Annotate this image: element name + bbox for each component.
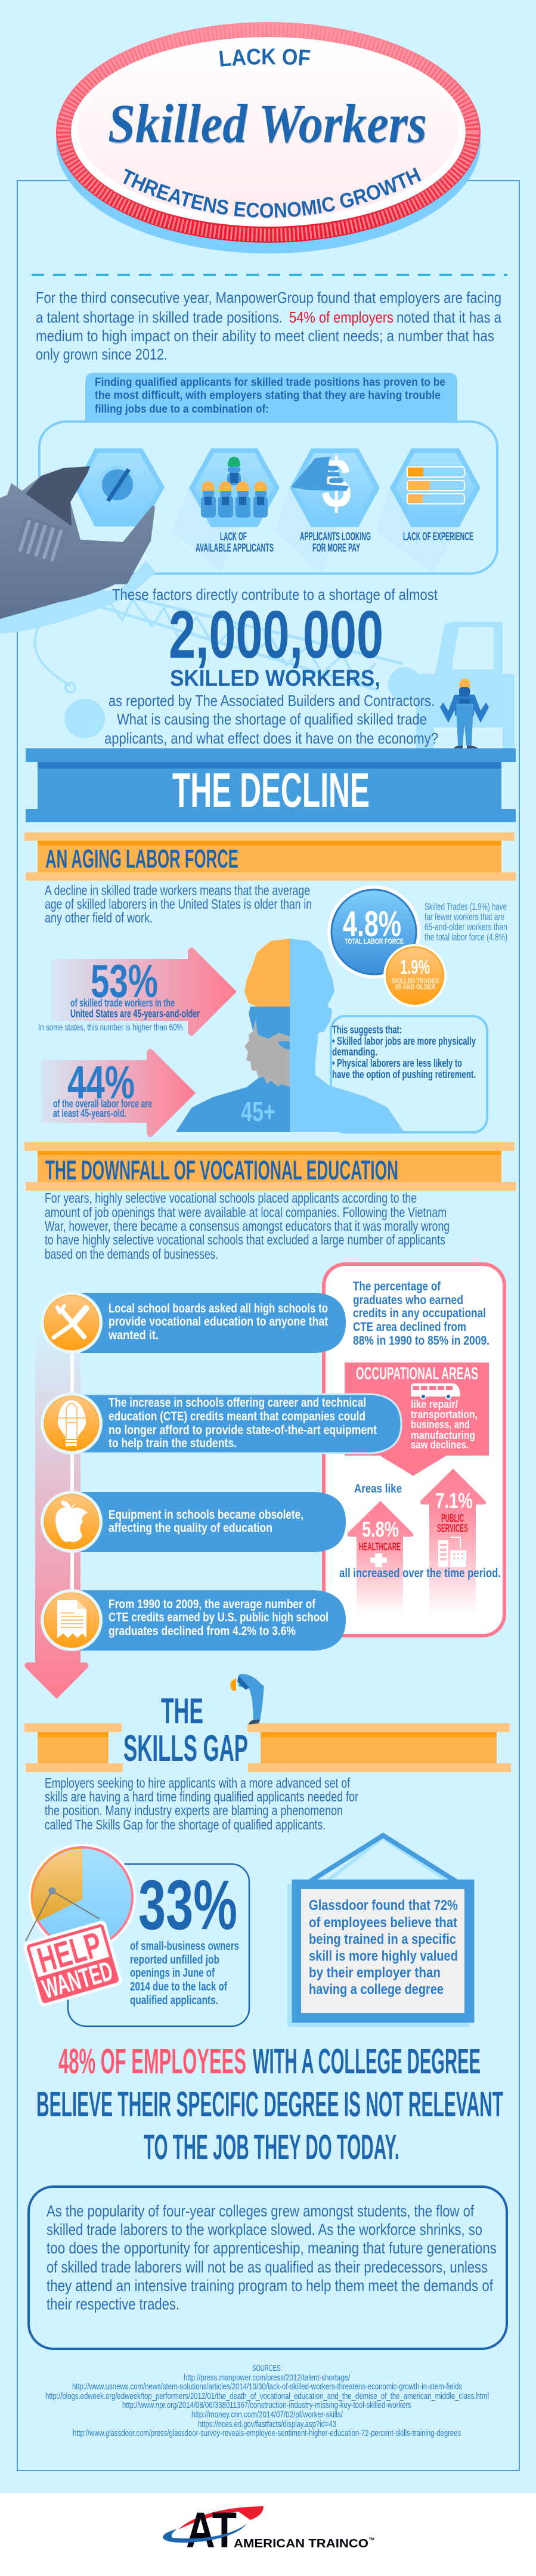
icon: bending worker — [230, 1674, 264, 1724]
logo: American Trainco: AMERICAN TRAINCO — [234, 2537, 368, 2550]
panel: occupational credits — [324, 1264, 504, 1636]
step 4: credits declined: From 1990 to 2009, the average number of — [109, 1597, 316, 1611]
icon: apple — [55, 1501, 88, 1542]
house: glassdoor stat: having a college degree — [309, 1981, 444, 1998]
logo: American Trainco — [163, 2502, 374, 2558]
stat circle: 1.9% skilled trades: SKILLED TRADES — [392, 977, 439, 985]
up arrow: healthcare 5.8%: HEALTHCARE — [359, 1541, 401, 1553]
icon: money hexagon: $ — [321, 444, 351, 523]
pie chart clock — [26, 1844, 136, 1951]
occupational areas box: saw declines. — [411, 1439, 469, 1451]
house: glassdoor stat: Glassdoor found that 72% — [309, 1897, 458, 1914]
heading banner: the decline — [26, 748, 516, 822]
logo: American Trainco: TM — [369, 2538, 374, 2541]
occupational areas box: like repair/ — [411, 1398, 458, 1410]
aging text: age of skilled laborers in the United States is older than in — [45, 896, 312, 912]
heading banner: an aging labor force — [24, 832, 516, 881]
sources: http://money.cnn.com/2014/07/02/pf/worker-skills/ — [191, 2410, 343, 2420]
panel: occupational credits: 88% in 1990 to 85% in 2009. — [353, 1334, 489, 1348]
sources: SOURCES: — [252, 2363, 282, 2373]
callout: this suggests that: • Physical laborers are less likely to — [332, 1057, 462, 1069]
callout heading: the most difficult, with employers stating that they are having trouble — [95, 389, 441, 402]
step 1: school boards: Local school boards asked all high schools to — [109, 1302, 328, 1315]
icon: shrugging worker — [440, 679, 489, 749]
skills gap text: the position. Many industry experts are blaming a phenomenon — [45, 1803, 343, 1818]
arrow stat: 53% — [38, 948, 237, 1036]
occupational areas box: business, and — [411, 1419, 470, 1431]
shortage statement: These factors directly contribute to a shortage of almost — [112, 586, 438, 603]
conclusion box: their respective trades. — [47, 2295, 179, 2313]
icon: available applicants hexagon — [189, 448, 280, 527]
up arrow: public services 7.1%: 7.1% — [435, 1488, 473, 1513]
aging text: any other field of work. — [45, 910, 153, 925]
step 1: school boards — [41, 1292, 346, 1354]
intro paragraph: only grown since 2012. — [36, 345, 168, 363]
stat circle: 1.9% skilled trades: 65 AND OLDER — [395, 983, 435, 991]
aging text: A decline in skilled trade workers means that the average — [45, 883, 310, 898]
icon: money hexagon — [290, 444, 380, 527]
label: lack of experience: LACK OF EXPERIENCE — [403, 531, 473, 543]
callout heading: filling jobs due to a combination of: — [95, 403, 269, 416]
up arrow: healthcare 5.8%: 5.8% — [362, 1517, 399, 1541]
stat circle: 4.8% total labor force: 4.8% — [343, 904, 401, 944]
sources: https://nces.ed.gov/fastfacts/display.asp?id=43 — [198, 2419, 336, 2429]
icon: buildings — [438, 1537, 466, 1567]
wrench illustration — [0, 466, 156, 633]
panel: combination of factors — [39, 373, 497, 574]
step 2: CTE credits: no longer afford to provide state-of-the-art equipment — [109, 1423, 377, 1437]
intro paragraph: noted that it has a — [396, 308, 501, 326]
label: applicants looking for more pay — [300, 531, 371, 555]
title: skilled workers: Skilled Workers — [108, 93, 427, 154]
conclusion box — [29, 2187, 507, 2349]
stat circle: 1.9% skilled trades — [383, 944, 447, 1007]
icon: document — [57, 1600, 86, 1638]
shortage statement: applicants, and what effect does it have on the economy? — [104, 729, 438, 747]
big number: 2,000,000: 2,000,000 — [169, 597, 383, 672]
stat circle: 4.8% total labor force — [327, 886, 420, 979]
stat box: 33% — [68, 1864, 249, 2026]
decorative crane and truck — [35, 596, 515, 748]
step 4: credits declined: CTE credits earned by U.S. public high school — [109, 1611, 329, 1624]
icon: experience bars hexagon — [390, 448, 481, 527]
help wanted sign: WANTED — [39, 1955, 116, 2004]
title: lack of: LACK OF — [219, 49, 310, 67]
shortage statement: What is causing the shortage of qualified skilled trade — [117, 710, 427, 728]
arrow stat: 53%: 53% — [91, 955, 158, 1007]
arrow stat: 44%: 44% — [67, 1056, 135, 1109]
icon: screw hexagon — [75, 448, 165, 527]
arrow stat: 44% — [41, 1049, 196, 1137]
house: glassdoor stat — [287, 1835, 475, 2027]
up arrow: public services 7.1%: PUBLIC — [441, 1512, 464, 1524]
caption: all increased: all increased over the time period. — [339, 1566, 501, 1580]
step 3: obsolete equipment — [41, 1491, 346, 1553]
footer — [0, 2493, 536, 2576]
sources: http://press.manpower.com/press/2012/talent-shortage/ — [184, 2373, 351, 2383]
arrow stat: 44%: at least 45-years-old. — [53, 1107, 126, 1119]
headline: 48% of employees — [36, 2042, 503, 2167]
house: glassdoor stat: of employees believe that — [309, 1915, 457, 1931]
vocational text — [45, 1190, 450, 1262]
arrow stat: 53%: United States are 45-years-and-older — [70, 1008, 200, 1020]
stat box: 33%: reported unfilled job — [130, 1953, 219, 1967]
panel: occupational credits: graduates who earned — [353, 1293, 463, 1307]
label: areas like: Areas like — [354, 1482, 402, 1496]
label: lack of available applicants: AVAILABLE APPLICANTS — [196, 542, 274, 555]
stat circle: 1.9% skilled trades: 1.9% — [400, 956, 430, 978]
callout heading — [85, 373, 457, 422]
skills gap text — [45, 1775, 358, 1832]
label: applicants looking for more pay: FOR MORE PAY — [312, 542, 360, 555]
arrow stat: 53%: of skilled trade workers in the — [70, 997, 175, 1009]
intro paragraph: a talent shortage in skilled trade positions. — [36, 308, 283, 326]
step 1: school boards: provide vocational education to anyone that — [109, 1315, 328, 1329]
callout: this suggests that — [331, 1016, 487, 1132]
label: lack of available applicants — [196, 531, 274, 555]
outline box — [39, 422, 497, 574]
panel: occupational credits: The percentage of — [353, 1280, 441, 1293]
icon: medical cross — [370, 1553, 387, 1567]
house: glassdoor stat: being trained in a specific — [309, 1931, 456, 1948]
skills gap text: skills are having a hard time finding qualified applicants needed for — [45, 1789, 358, 1804]
hexagon shadows — [173, 488, 459, 572]
stat circle: 4.8% total labor force: TOTAL LABOR FORCE — [345, 937, 404, 946]
occupational areas box — [345, 1363, 489, 1476]
stat box: 33%: qualified applicants. — [130, 1994, 218, 2007]
skills gap text: Employers seeking to hire applicants with a more advanced set of — [45, 1775, 350, 1791]
stat box: 33%: 33% — [138, 1866, 237, 1945]
panel: occupational credits: credits in any occupational — [353, 1306, 486, 1320]
up arrow: public services 7.1% — [420, 1469, 486, 1615]
heading banner: the skills gap — [24, 1691, 511, 1772]
shortage statement — [104, 586, 438, 747]
up arrow: healthcare 5.8% — [348, 1501, 413, 1615]
step 2: CTE credits: to help train the students. — [109, 1436, 237, 1450]
step 4: credits declined — [41, 1589, 346, 1651]
headline: 48% of employees: 48% OF EMPLOYEES — [58, 2042, 246, 2081]
label: 45+: 45+ — [241, 1096, 275, 1127]
callout heading: Finding qualified applicants for skilled trade positions has proven to be — [95, 376, 445, 389]
vocational text: For years, highly selective vocational schools placed applicants according to the — [45, 1190, 417, 1206]
icon: crossed tools — [54, 1306, 86, 1337]
step 2: CTE credits — [41, 1392, 401, 1454]
occupational areas box: transportation, — [411, 1408, 478, 1420]
occupational areas box: manufacturing — [411, 1429, 475, 1441]
house: glassdoor stat: by their employer than — [309, 1965, 441, 1981]
arrow stat: 53%: In some states, this number is higher than 60% — [38, 1023, 183, 1033]
heading banner: the decline: THE DECLINE — [172, 763, 370, 818]
stat box: 33%: of small-business owners — [130, 1940, 239, 1953]
intro paragraph — [36, 289, 501, 363]
title: threatens economic growth: THREATENS ECONOMIC GROWTH — [123, 167, 421, 218]
help wanted sign: HELP — [33, 1924, 106, 1980]
callout: this suggests that: This suggests that: — [332, 1024, 402, 1036]
sources: http://www.npr.org/2014/08/06/338011367/construction-industry-missing-key-tool-skilled-workers — [122, 2400, 411, 2410]
panel: occupational credits: CTE area declined from — [353, 1320, 466, 1334]
stat box: 33%: openings in June of — [130, 1967, 215, 1980]
aging text — [45, 883, 312, 925]
label: applicants looking for more pay: APPLICANTS LOOKING — [300, 531, 371, 543]
skills gap text: called The Skills Gap for the shortage of qualified applicants. — [45, 1817, 326, 1832]
heading banner: an aging labor force: AN AGING LABOR FORCE — [45, 844, 238, 874]
step 1: school boards: wanted it. — [108, 1329, 159, 1342]
down arrow — [24, 1328, 88, 1699]
icon: light bulb — [51, 1400, 92, 1446]
stat box: 33%: 2014 due to the lack of — [130, 1980, 227, 1993]
up arrow: public services 7.1%: SERVICES — [437, 1522, 468, 1534]
arrow stat: 44%: of the overall labor force are — [53, 1098, 152, 1110]
side note: skilled trades comparison: far fewer workers that are — [425, 911, 504, 922]
title badge — [56, 22, 481, 253]
heading banner: downfall of vocational education — [24, 1142, 516, 1191]
callout: this suggests that: • Skilled labor jobs are more physically — [332, 1035, 476, 1047]
step 3: obsolete equipment: Equipment in schools became obsolete, — [109, 1508, 303, 1522]
callout: this suggests that: have the option of pushing retirement. — [332, 1069, 476, 1080]
heading banner: the skills gap: SKILLS GAP — [123, 1728, 248, 1769]
help wanted sign — [22, 1919, 123, 2008]
side note: skilled trades comparison — [425, 901, 507, 943]
subheading: skilled workers: SKILLED WORKERS, — [170, 666, 380, 691]
step 2: CTE credits: education (CTE) credits meant that companies could — [109, 1410, 365, 1423]
step 4: credits declined: graduates declined from 4.2% to 3.6% — [109, 1624, 296, 1638]
sources — [45, 2363, 489, 2438]
vocational text: based on the demands of businesses. — [45, 1246, 218, 1262]
callout: this suggests that: demanding. — [332, 1046, 377, 1058]
step 3: obsolete equipment: affecting the quality of education — [109, 1521, 272, 1535]
worker head illustration — [176, 939, 404, 1132]
house: glassdoor stat: skill is more highly valued — [309, 1948, 458, 1964]
shortage statement: as reported by The Associated Builders and Contractors. — [109, 692, 435, 710]
label: lack of available applicants: LACK OF — [220, 531, 247, 543]
intro paragraph: 54% of employers — [289, 308, 394, 326]
heading banner: the skills gap: THE — [161, 1691, 203, 1731]
icon: bus — [411, 1383, 460, 1399]
step 2: CTE credits: The increase in schools offering career and technical — [109, 1396, 366, 1410]
logo: American Trainco: AT — [186, 2502, 237, 2558]
